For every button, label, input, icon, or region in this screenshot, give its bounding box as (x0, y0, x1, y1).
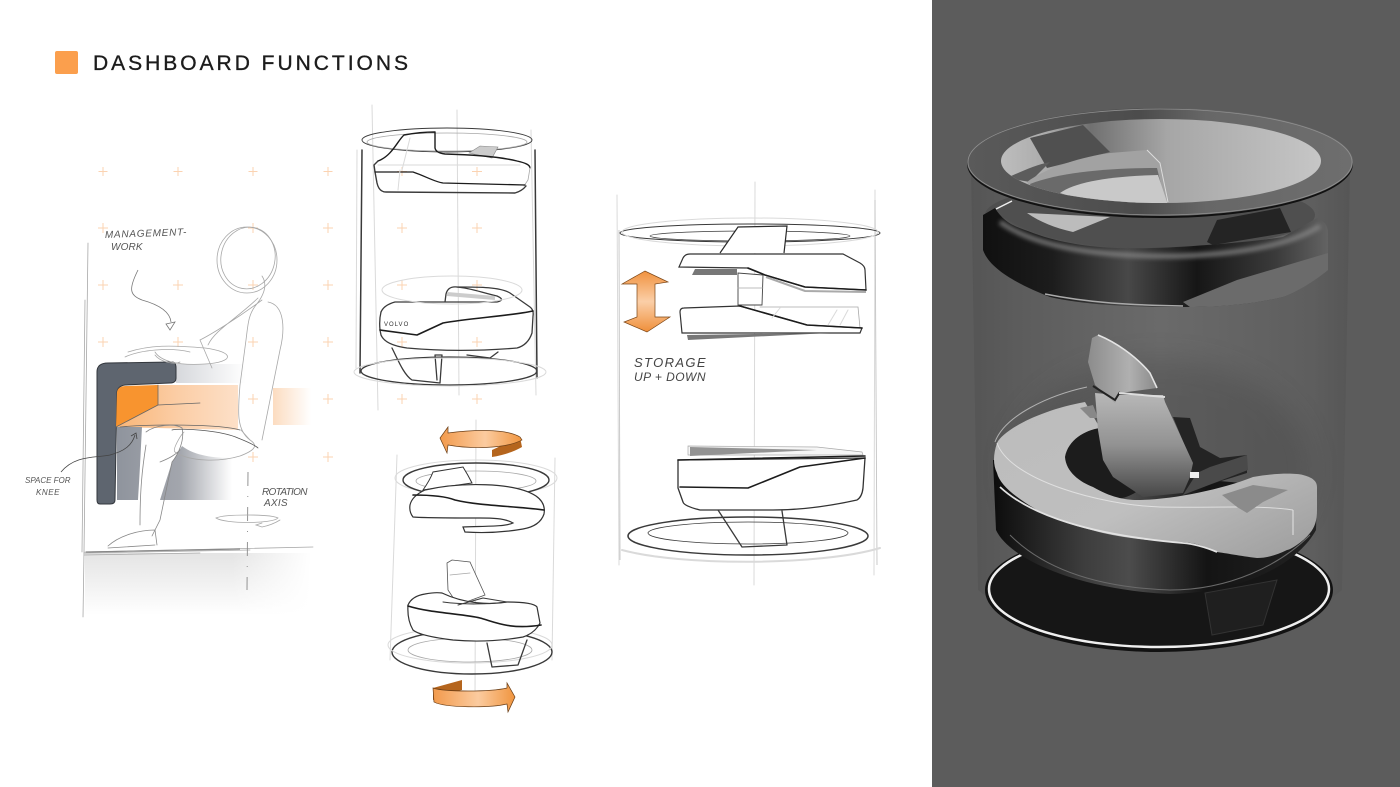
handwritten label: storage up + down (634, 355, 706, 384)
title: dashboard functions: DASHBOARD FUNCTIONS (93, 52, 408, 75)
upper glass ring (967, 108, 1353, 218)
sketch: side view of seated person at dashboard (25, 167, 333, 617)
handwritten label: axis: AXIS (263, 498, 288, 509)
arrow: up and down (622, 271, 670, 332)
sketch: cylinder, rotation (388, 420, 557, 712)
base disc with light ring (985, 528, 1333, 652)
handwritten label: rotation axis: ROTATION (262, 487, 308, 498)
arrow: management-work (132, 270, 175, 330)
handwritten label: space for knee: SPACE FOR (25, 476, 71, 485)
seat well (1062, 424, 1154, 500)
handwritten label: storage up + down: UP + DOWN (634, 370, 706, 384)
arrow: space for knee (61, 433, 137, 472)
render: dashboard cylinder (967, 108, 1353, 652)
handwritten label: storage up + down: STORAGE (634, 355, 706, 370)
panel: dark render background (932, 0, 1400, 787)
lower drum body (993, 460, 1317, 594)
floor under upper ring (985, 181, 1315, 249)
seen through ring: seat and dashboard (1007, 125, 1170, 205)
sketch: cylinder, stored up position (354, 105, 546, 410)
arrow: rotation clockwise bottom (433, 680, 515, 712)
transparent cylinder (971, 170, 1350, 635)
orange storage section (116, 385, 158, 427)
brand label: volvo: VOLVO (384, 322, 409, 328)
arrow: rotation clockwise top (440, 427, 522, 457)
handwritten label: management-work: MANAGEMENT- (105, 227, 187, 241)
figure sketch lines (108, 222, 283, 590)
seat (1088, 335, 1248, 497)
handwritten label: work: WORK (111, 242, 144, 253)
sketch: storage up and down (617, 182, 880, 585)
upper ring band (983, 208, 1328, 307)
dark dashboard L profile (97, 362, 176, 504)
handwritten label: knee: KNEE (36, 488, 60, 497)
lower top surface (994, 402, 1317, 558)
